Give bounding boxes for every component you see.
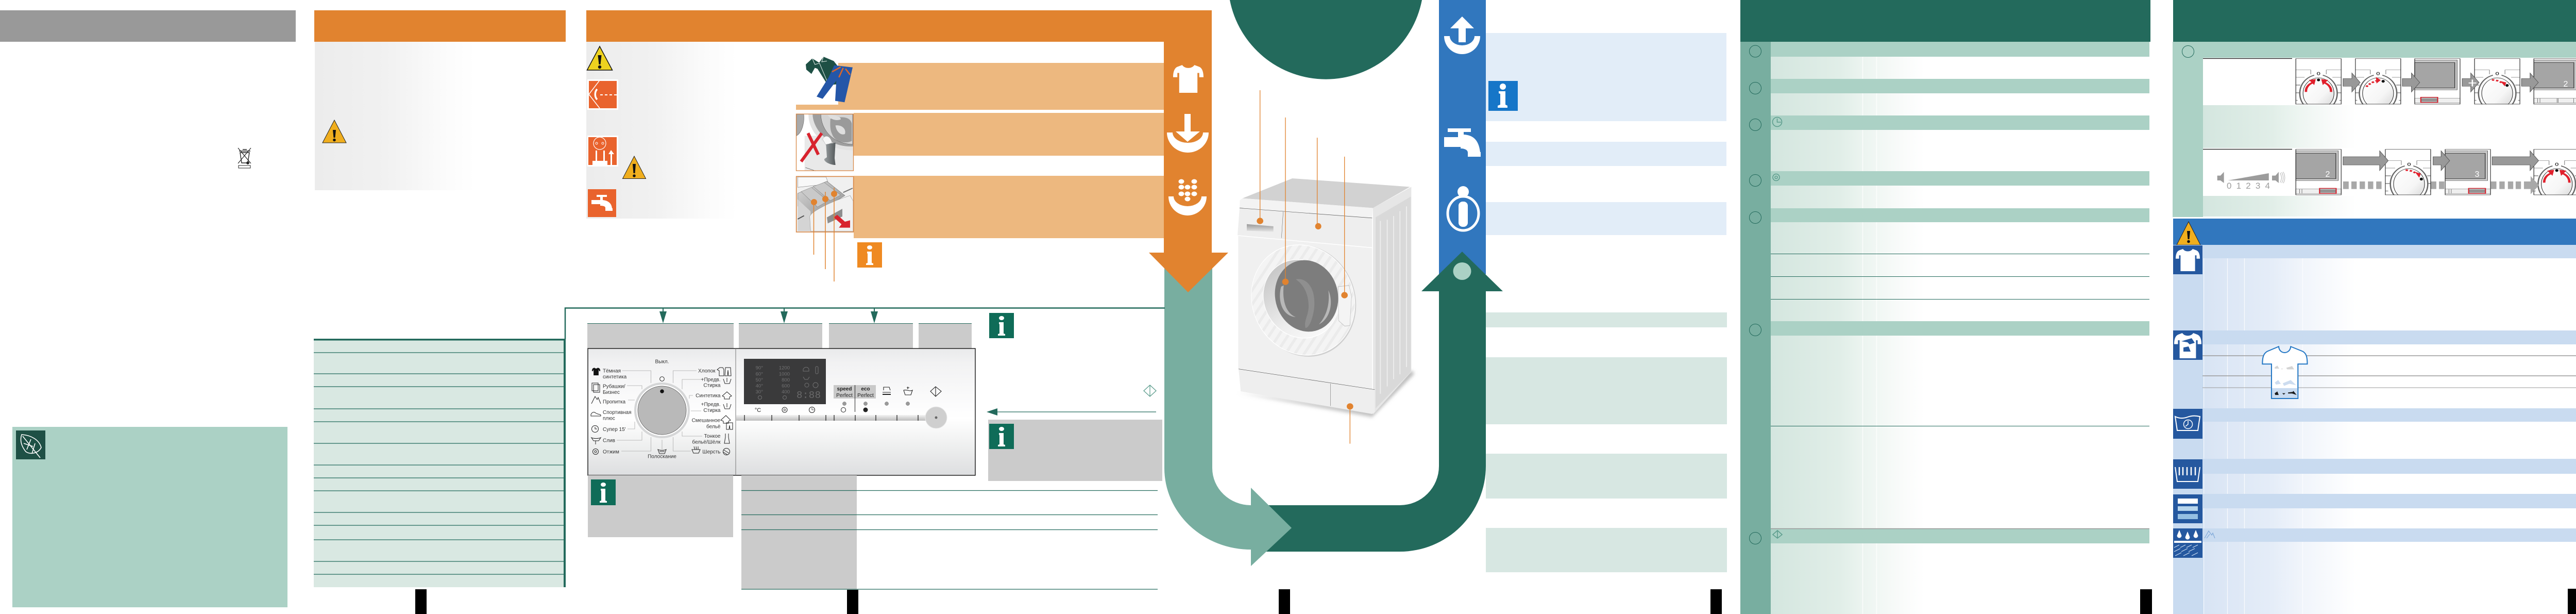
LCD display: 30° — [756, 389, 763, 395]
dial off and rinse labels: Полоскание — [648, 454, 676, 460]
panel: display label — [739, 323, 822, 349]
laundry tips side column — [2173, 245, 2204, 614]
LCD display — [744, 359, 826, 404]
panel: options label — [829, 323, 913, 349]
LCD display: 50° — [756, 377, 763, 383]
icon: eye and distance — [587, 79, 618, 110]
panel: safety gradient block — [315, 42, 475, 190]
programme labels right: бельё/Шёлк — [692, 439, 721, 445]
icon: load laundry arrow — [1167, 114, 1209, 153]
volume scale digits: 0 1 2 3 4 — [2227, 181, 2270, 191]
panel: start label — [919, 323, 972, 349]
programme labels right: Смешанное — [692, 418, 720, 424]
dashed return arrows — [2343, 176, 2539, 194]
icon: info circle — [1448, 186, 1479, 230]
page 6 header bar — [2173, 0, 2576, 42]
option LEDs — [842, 402, 910, 406]
icon: socket and plug — [587, 136, 618, 167]
illustration: work clothes — [806, 57, 853, 102]
icon: stacked fabric bars — [2173, 494, 2202, 523]
step number circles — [1750, 45, 1761, 544]
illustration: detergent drawer — [796, 176, 854, 233]
panel: blue block 2 — [1486, 142, 1726, 166]
icon: small warning — [622, 156, 646, 178]
icon: green info — [989, 424, 1014, 449]
arrow: pointing to start button — [987, 408, 1156, 416]
programme labels left: Слив — [603, 438, 615, 443]
arrow: to programme selector — [659, 308, 667, 323]
panel: green block 2 — [1486, 357, 1727, 424]
blue band — [1439, 0, 1486, 274]
icon: drops on fabric — [2173, 528, 2202, 558]
page marker — [847, 590, 858, 614]
display step 5 — [2534, 58, 2576, 104]
panel: tips gradient — [2204, 258, 2356, 614]
arrow: dark green head — [1421, 252, 1503, 291]
dial off and rinse labels — [648, 359, 676, 460]
icon: white shirt — [2173, 245, 2202, 274]
display button icons: °C — [755, 407, 761, 413]
icon: shirt on orange band — [1173, 65, 1204, 93]
speed and eco perfect labels: speed — [837, 387, 852, 392]
display step 8 — [2445, 149, 2491, 195]
LCD display: 8:88 — [796, 390, 821, 401]
programme connector lines — [617, 371, 702, 451]
panel: gray info left — [588, 475, 733, 537]
panel: loading step 1 — [796, 63, 1164, 110]
programme labels left: Отжим — [603, 450, 619, 455]
display step 3 — [2414, 58, 2461, 104]
programme labels left: синтетика — [603, 374, 627, 380]
LCD display: 1200 — [779, 365, 790, 371]
programme labels right: +Предв. — [701, 402, 720, 407]
dial step 4 — [2474, 58, 2520, 104]
speed and eco perfect labels — [834, 385, 876, 412]
speed and eco perfect labels: eco — [861, 387, 870, 392]
programme labels right — [692, 368, 721, 455]
panel: programme selector label — [587, 323, 734, 349]
dial off and rinse labels: Выкл. — [655, 359, 669, 365]
volume adjustment steps — [2217, 58, 2576, 203]
arrow: to option buttons — [871, 308, 878, 323]
programme labels left — [603, 368, 632, 455]
LCD display: 60° — [756, 371, 763, 377]
illustration: stained t-shirt — [2262, 346, 2307, 399]
icon: green info — [591, 479, 616, 505]
icon: mountains — [2205, 531, 2215, 538]
page marker — [1710, 589, 1722, 614]
display value 2: 2 — [2564, 80, 2568, 89]
machine shadow — [1238, 371, 1415, 417]
icon: warning triangle — [2177, 222, 2200, 245]
machine door — [1246, 236, 1361, 366]
arrow: to display buttons — [781, 308, 788, 323]
speed and eco perfect labels: Perfect — [857, 393, 874, 399]
LCD display: 1000 — [779, 371, 790, 377]
step number column — [1740, 42, 1771, 614]
icon: volume scale — [2217, 172, 2285, 183]
panel: settings gradient — [1771, 57, 1924, 614]
stain row lines — [2202, 356, 2576, 376]
panel: gray info right — [988, 420, 1162, 481]
illustration: washing machine — [1238, 90, 1415, 444]
step arrows bottom row — [2343, 151, 2538, 171]
icon: orange info — [857, 242, 882, 268]
programme labels right: Хлопок — [698, 368, 716, 374]
bracket line over control panel — [565, 308, 1165, 339]
option icons — [883, 387, 941, 396]
LCD display: 600 — [782, 384, 790, 389]
LCD display: 400 — [782, 389, 790, 395]
icon: stained shirt — [2173, 330, 2202, 360]
dark green flow band — [1251, 289, 1486, 552]
programme labels left: Тёмная — [603, 368, 621, 374]
panel: green block 1 — [1486, 312, 1727, 327]
illustration: item caught in door — [796, 114, 854, 171]
dial — [634, 377, 690, 438]
icon: green info top — [989, 313, 1014, 338]
programme labels right: Шерсть — [702, 450, 720, 455]
page 1 header bar — [0, 10, 296, 42]
page marker — [415, 589, 427, 614]
icon: blue info — [1488, 81, 1518, 111]
tips section bars — [2204, 245, 2576, 542]
panel: loading step 2 — [854, 113, 1164, 156]
programme labels right: Стирка — [703, 408, 721, 413]
arrow: teal head — [1251, 488, 1292, 566]
icon: tub with bars — [2173, 459, 2202, 489]
icon: water tap — [588, 189, 616, 217]
LCD display: 800 — [782, 377, 790, 383]
LCD display: 40° — [756, 384, 763, 389]
panel: environment note — [12, 427, 287, 607]
icon: tub with clock — [2173, 409, 2202, 439]
dial step 2 — [2355, 58, 2401, 104]
machine part callouts — [1257, 90, 1353, 444]
dark green semicircle tab — [1230, 0, 1422, 79]
panel frame — [588, 349, 975, 475]
icon: start diamond — [1144, 385, 1156, 396]
panel: blue block 1 — [1486, 33, 1726, 121]
panel: volume text rows — [2203, 59, 2356, 217]
icon: crossed-out wheelie bin — [238, 148, 251, 168]
drawer compartment callouts — [811, 188, 837, 281]
programme labels left: Бизнес — [603, 390, 620, 395]
control panel illustration — [588, 349, 975, 475]
step arrows top row — [2343, 73, 2538, 92]
programme labels left: Супер 15' — [603, 427, 626, 433]
page marker — [2140, 589, 2152, 614]
page 3 orange header — [586, 10, 1212, 42]
panel: blue block 3 — [1486, 202, 1726, 235]
display step 6 — [2296, 149, 2342, 195]
programme labels left: Спортивная — [603, 410, 632, 416]
display value 2 second row: 2 — [2326, 170, 2330, 179]
panel: safety notes gradient — [586, 42, 737, 219]
icon: yellow warning — [587, 46, 612, 70]
programme labels right: бельё — [706, 424, 721, 430]
mid band marker — [1453, 262, 1471, 280]
legend row lines — [741, 491, 1158, 589]
page 5 header bar — [1740, 0, 2150, 42]
page marker — [2568, 589, 2576, 614]
page 2 header bar — [314, 10, 566, 42]
display value 3: 3 — [2475, 170, 2480, 179]
settings row lines — [1771, 254, 2149, 426]
panel: volume settings side — [2173, 42, 2576, 217]
icon: warning triangle — [323, 120, 346, 143]
dial step 7 — [2385, 149, 2431, 195]
icon: tap on blue band — [1444, 128, 1481, 157]
panel: green block 3 — [1486, 454, 1727, 499]
page marker — [1279, 589, 1290, 614]
settings section bars — [1771, 42, 2149, 543]
icon: start diamond in bar — [1773, 530, 1782, 538]
icon: clock in bar — [1772, 118, 1782, 127]
step circle — [2182, 45, 2194, 58]
page 6 blue header — [2173, 219, 2576, 245]
teal flow band — [1164, 258, 1251, 550]
programme labels left: Пропитка — [603, 399, 625, 405]
panel: green block 4 — [1486, 528, 1727, 572]
dial step 9 — [2534, 149, 2576, 195]
panel: programme table — [314, 339, 566, 587]
panel: gray legend column — [741, 475, 857, 589]
programme icons — [591, 368, 733, 455]
speed and eco perfect labels: Perfect — [836, 393, 853, 399]
panel: loading step 3 — [854, 176, 1164, 238]
programme labels right: Тонкое — [704, 434, 721, 439]
icon: unload arrow — [1444, 16, 1480, 54]
programme labels left: Рубашки/ — [603, 384, 625, 390]
programme labels right: Стирка — [703, 383, 721, 389]
orange flow arrow — [1149, 42, 1228, 292]
icon: detergent dots — [1168, 179, 1207, 215]
programme labels right: Синтетика — [696, 393, 721, 399]
LCD display: 90° — [756, 365, 763, 371]
machine body — [1238, 178, 1411, 414]
programme labels left: плюс — [603, 416, 615, 422]
display button icons — [755, 407, 868, 413]
icon: leaf — [16, 430, 45, 459]
start knob — [925, 407, 947, 428]
button strip — [736, 415, 927, 421]
dial step 1 — [2296, 58, 2342, 104]
programme labels right: +Предв. — [701, 377, 720, 383]
icon: spin in bar — [1773, 174, 1780, 180]
